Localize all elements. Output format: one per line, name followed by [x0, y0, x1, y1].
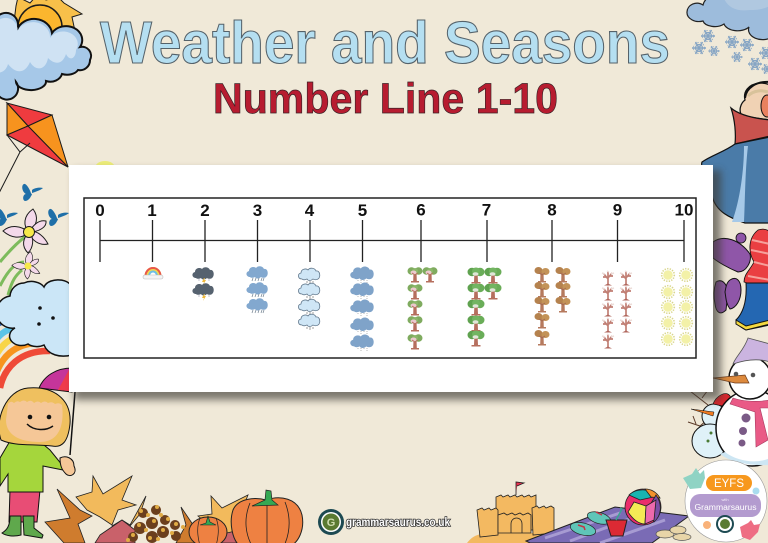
Grammarsaurus pill: Grammarsaurus — [694, 503, 756, 512]
number labels: 5 — [358, 201, 367, 220]
icons: 7 summer trees — [468, 268, 502, 346]
illustration: butterflies — [0, 184, 69, 226]
icons: 5 blue clouds — [350, 267, 374, 351]
icons: 8 autumn trees — [534, 267, 570, 346]
number labels: 1 — [147, 201, 157, 220]
icons: 10 suns — [662, 269, 692, 345]
icons: 4 pale clouds — [298, 268, 320, 330]
title: Weather and Seasons — [100, 10, 670, 76]
illustration: man in winter coat — [702, 82, 768, 223]
illustration: sandcastle — [467, 482, 557, 543]
illustration: yellow sun peeking from behind panel — [95, 161, 115, 175]
illustration: flowers — [0, 209, 48, 295]
icon: pink handprint — [740, 520, 760, 540]
illustration: purple winter hat — [713, 233, 750, 272]
badge: EYFS with Grammarsaurus — [683, 460, 767, 542]
logo: grammarsaurus: grammarsaurus.co.uk — [346, 517, 451, 529]
number labels: 6 — [416, 200, 426, 220]
number labels: 0 — [95, 201, 105, 220]
number labels: 9 — [613, 200, 622, 220]
illustration: autumn leaves — [45, 476, 248, 543]
Grammarsaurus pill: with — [721, 497, 729, 502]
illustration: beach mat — [526, 507, 689, 543]
subtitle: Number Line 1-10 — [213, 75, 558, 123]
illustration: beach ball — [625, 489, 661, 525]
white panel shadow — [74, 170, 721, 400]
number line axis and ticks — [100, 220, 684, 262]
illustration: small snowman — [688, 390, 733, 458]
illustration: bucket — [606, 508, 627, 536]
number labels: 7 — [482, 200, 491, 220]
illustration: blue boots — [736, 283, 768, 330]
number labels: 10 — [675, 200, 693, 220]
illustration: purple gloves — [714, 278, 741, 313]
illustration: kite — [0, 103, 68, 195]
illustration: top right snow cloud — [687, 0, 768, 40]
illustration: snowflakes — [692, 30, 768, 74]
decorative blue blob — [752, 488, 760, 494]
illustration: rainbow — [0, 320, 50, 388]
illustration: large snowman — [713, 338, 768, 466]
illustration: shells — [656, 526, 691, 540]
number line frame — [84, 198, 696, 358]
illustration: pine cones — [126, 505, 185, 543]
illustration: flip flops — [569, 509, 612, 538]
small grammarsaurus logo — [716, 515, 734, 533]
logo: grammarsaurus: G — [327, 517, 335, 529]
illustration: large pumpkin — [231, 490, 303, 543]
Grammarsaurus pill — [690, 494, 761, 517]
icons: 1 rainbow — [143, 267, 163, 279]
number labels: 3 — [253, 201, 262, 220]
illustration: umbrella — [39, 368, 80, 455]
number labels: 4 — [305, 201, 315, 220]
illustration: red striped scarf — [744, 229, 768, 290]
icons: 3 rain clouds — [246, 266, 268, 313]
icons: 9 winter trees — [602, 271, 632, 348]
logo: grammarsaurus — [318, 509, 451, 535]
decorative orange blob — [703, 521, 711, 529]
icon: teal handprint — [683, 468, 705, 489]
panel: number line card — [69, 165, 713, 392]
EYFS pill: EYFS — [714, 478, 744, 490]
illustration: smiling cloud — [0, 280, 72, 356]
illustration: small pumpkin — [189, 516, 227, 543]
number labels: 2 — [200, 201, 210, 220]
illustration: sun behind cloud — [0, 0, 91, 100]
illustration: girl in green top — [0, 388, 75, 538]
icons: 6 spring trees — [408, 267, 438, 350]
number labels: 8 — [547, 200, 557, 220]
icons: 2 storm clouds — [192, 267, 214, 301]
number labels — [95, 200, 693, 220]
